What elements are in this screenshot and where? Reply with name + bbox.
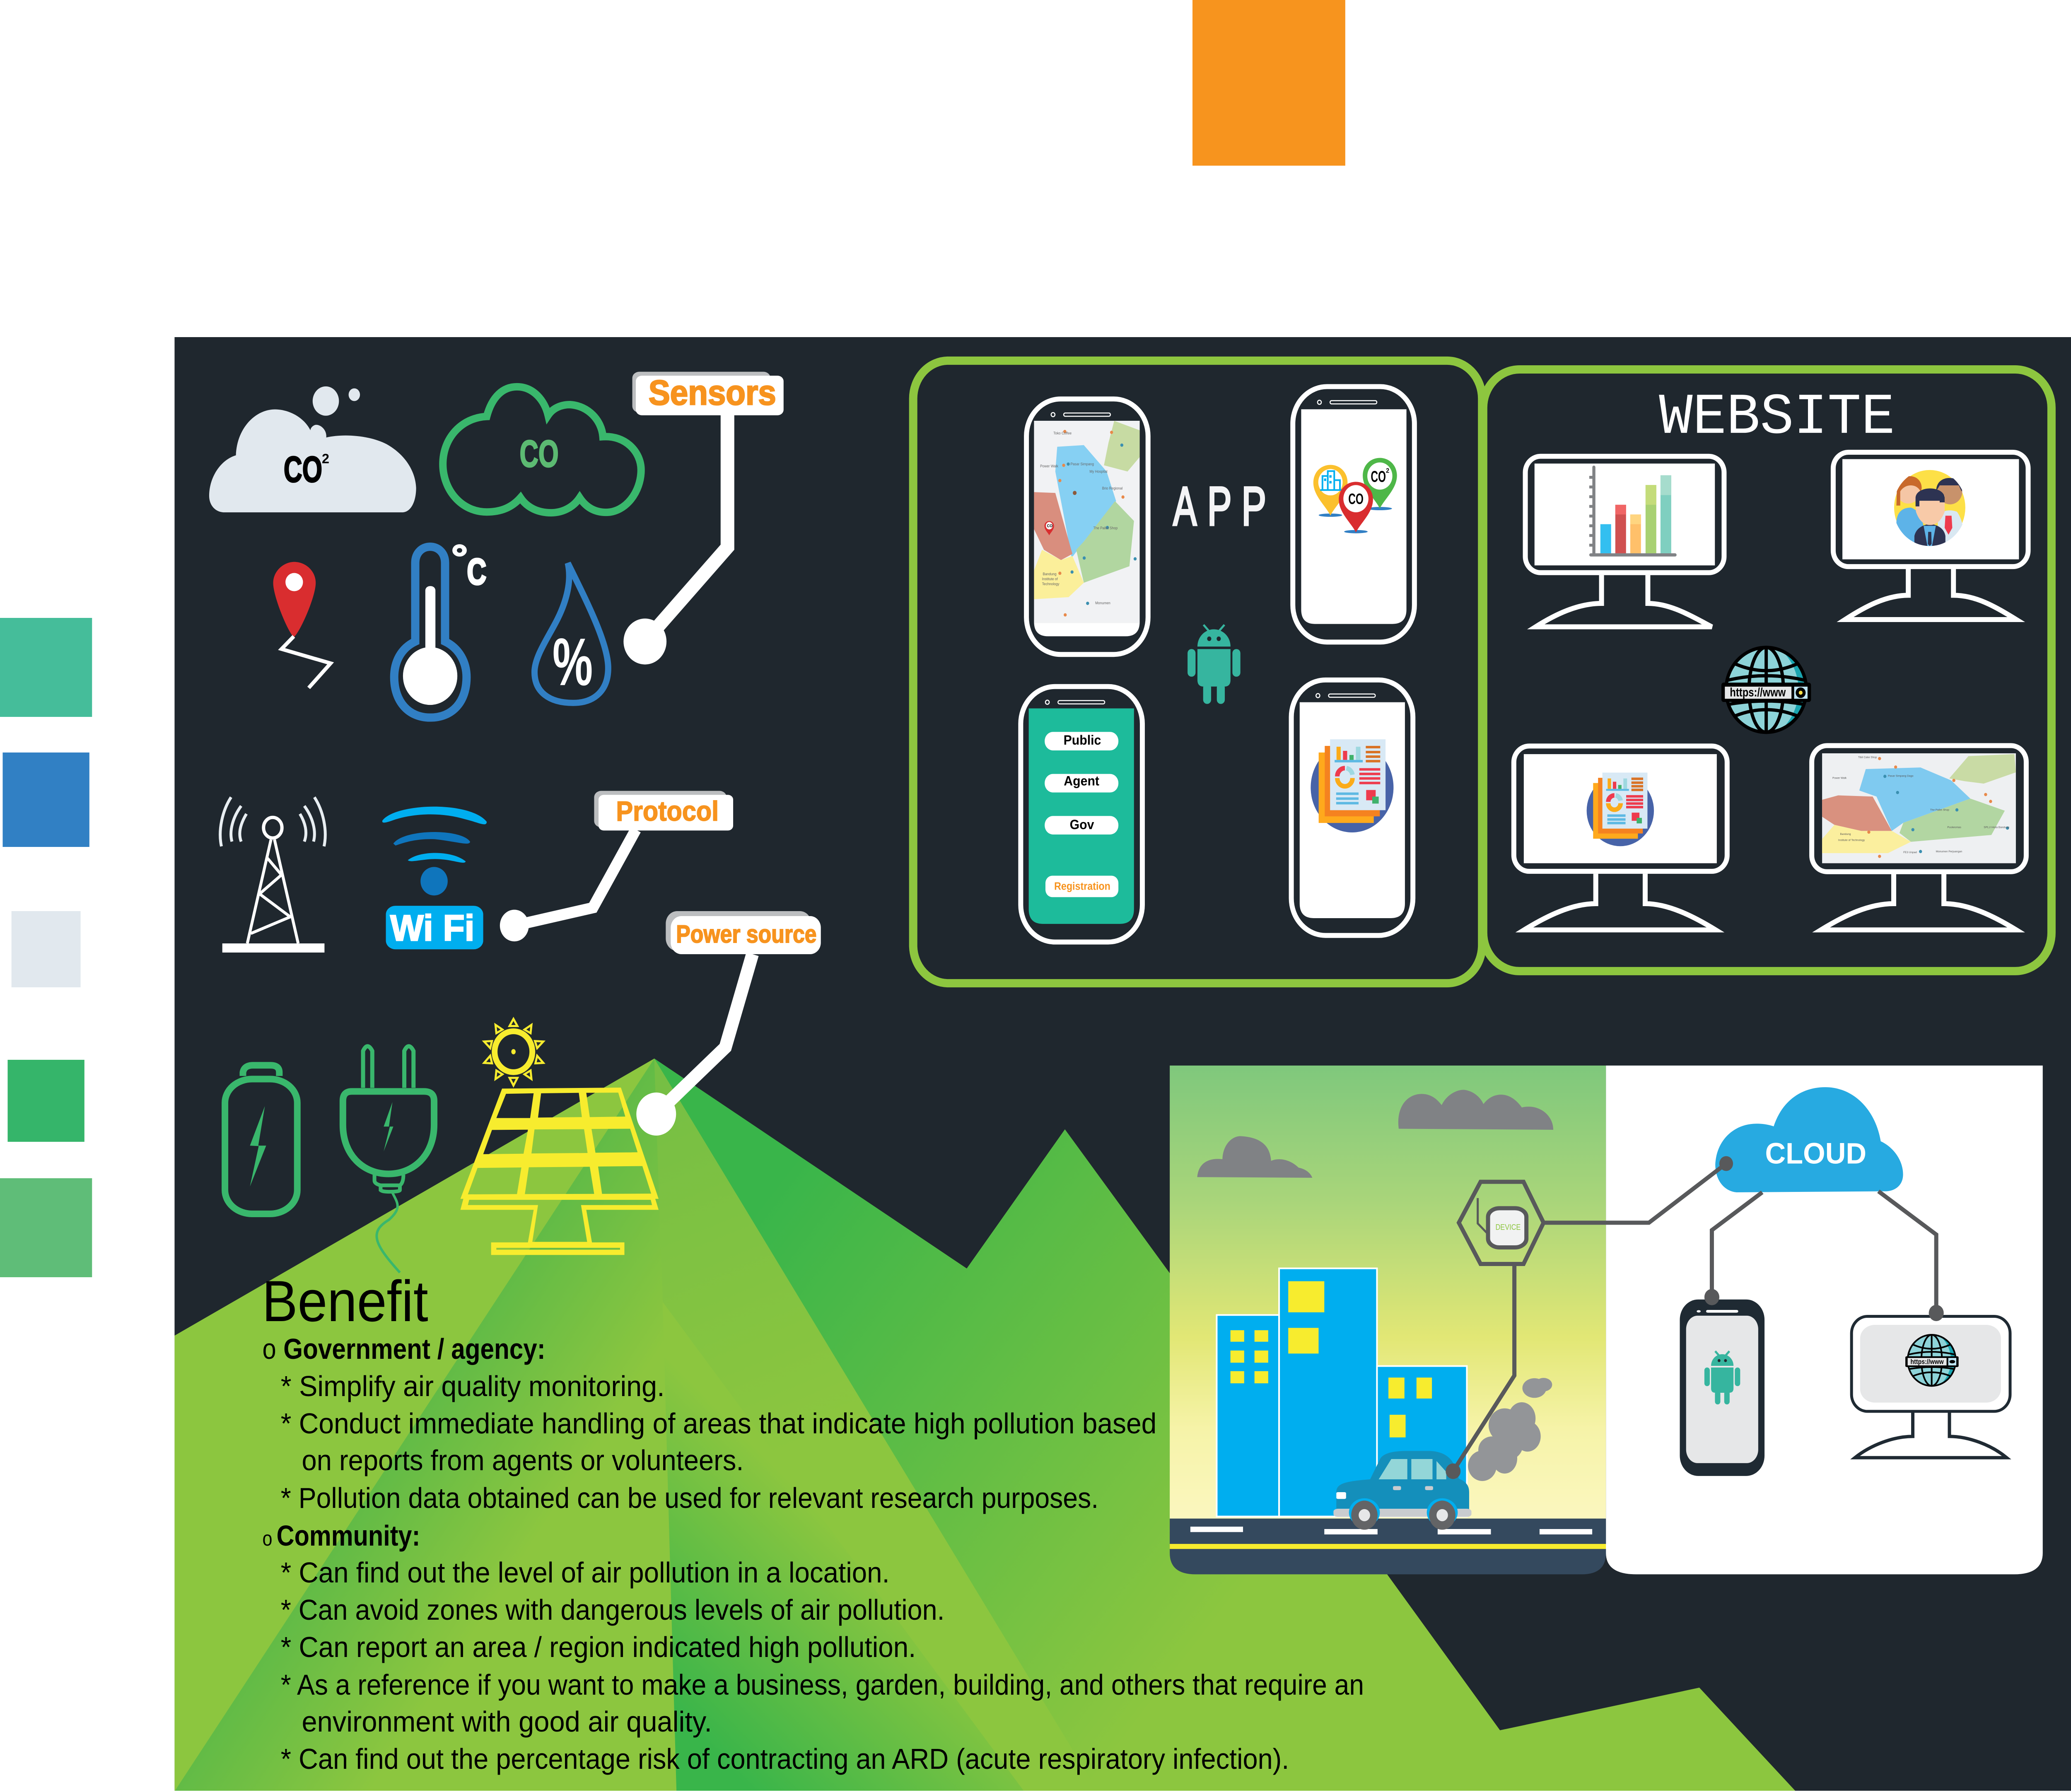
monitor: bar chart — [1525, 456, 1724, 627]
icon: sun — [484, 1019, 543, 1085]
text block: benefits list: * Pollution data obtained can be used for relevant research purposes. — [281, 1482, 1098, 1515]
icon: location pin — [273, 562, 331, 688]
monitor: pollution map: The Pallet Shop — [1930, 808, 1949, 812]
icon: CO cloud — [443, 387, 641, 513]
text block: benefits list: * Can avoid zones with dangerous levels of air pollution. — [281, 1594, 945, 1626]
icon: android — [1188, 625, 1241, 704]
monitor: report — [1514, 746, 1727, 930]
monitor: pollution map: Tibil Cake Shop — [1858, 756, 1877, 759]
bar chart — [1589, 465, 1677, 557]
subheading: community: Community: — [277, 1520, 420, 1552]
phone: pollution map: Institute of — [1042, 577, 1058, 581]
icon: globe: https://www — [1730, 686, 1786, 699]
icon: globe: https://www — [1911, 1358, 1944, 1365]
callout: Protocol: Protocol — [616, 796, 719, 827]
icon: clouds — [1197, 1090, 1553, 1178]
phone: pollution map — [1026, 399, 1148, 654]
icon: radio tower — [220, 797, 325, 953]
icon: plug — [343, 1046, 434, 1273]
subheading: community: o — [263, 1527, 273, 1550]
pin: CO2: 2 — [1386, 467, 1389, 475]
phone: pollution map: Technology — [1042, 582, 1060, 586]
phone: pollution map: Pasar Simpang — [1071, 462, 1094, 466]
icon: report — [1311, 739, 1393, 832]
text block: benefits list: * Conduct immediate handling of areas that indicate high pollution based — [281, 1408, 1156, 1440]
icon: CLOUD: CLOUD — [1765, 1137, 1866, 1170]
heading: APP: P — [1241, 475, 1266, 537]
phone: pollutant pins — [1293, 387, 1414, 642]
monitor: pollution map: Bandung — [1840, 833, 1851, 836]
colour palette swatches — [0, 618, 92, 1277]
button: Registration: Registration — [1054, 880, 1110, 892]
button: Agent: Agent — [1064, 773, 1099, 789]
icon: CO cloud: CO — [519, 432, 559, 475]
icon: thermometer: ° — [451, 537, 468, 578]
icon: thermometer — [394, 537, 486, 718]
icon: CO2 cloud: CO — [284, 449, 322, 490]
subheading: government: Government / agency: — [283, 1333, 546, 1365]
phone: pollution map: Brio Regional — [1102, 486, 1122, 490]
phone: pollution map: Monumen — [1095, 601, 1110, 605]
monitor: pollution map: Pasar Simpang Dago — [1888, 774, 1914, 778]
monitor: pollution map: Power Walk — [1832, 777, 1847, 779]
panel: website — [1483, 369, 2052, 971]
button: Public — [1045, 732, 1118, 750]
text block: benefits list: * Can find out the percentage risk of contracting an ARD (acute respiratory infection). — [281, 1743, 1289, 1775]
icon: device hexagon: DEVICE — [1496, 1223, 1521, 1232]
scene: city sky — [1170, 1066, 1606, 1519]
icon: device hexagon — [1459, 1182, 1544, 1264]
text block: benefits list: on reports from agents or volunteers. — [302, 1445, 743, 1477]
background panel — [174, 337, 2071, 1791]
white panel — [1606, 1066, 2043, 1574]
callout: Sensors: Sensors — [649, 373, 776, 412]
icon: android — [1704, 1351, 1740, 1404]
green mountains background — [174, 1035, 1855, 1792]
heading: Benefit: Benefit — [262, 1269, 428, 1334]
pin: building — [1313, 465, 1347, 516]
icon: thermometer: C — [467, 551, 486, 592]
button: Gov: Gov — [1070, 817, 1094, 832]
panel border — [1483, 369, 2052, 971]
panel border — [913, 361, 1482, 983]
phone: pollution map: Toko Coffee — [1053, 431, 1072, 435]
icon: CLOUD — [1715, 1087, 1903, 1192]
phone: report — [1291, 680, 1413, 936]
icon: car — [1333, 1451, 1471, 1530]
decorative orange square — [1192, 0, 1345, 166]
icon: buildings — [1217, 1269, 1467, 1517]
icon: CO2 cloud: 2 — [322, 451, 329, 466]
monitor: pollution map: Monumen Perjuangan — [1936, 850, 1962, 853]
icon: Wi-Fi — [382, 807, 487, 949]
connection dots — [1446, 1156, 1944, 1479]
pin: CO2: CO — [1371, 468, 1386, 485]
icon: globe — [1905, 1335, 1959, 1386]
icon: battery — [225, 1065, 297, 1214]
monitor: pollution map: Puskesmas — [1947, 826, 1961, 829]
connector: sensors — [623, 412, 727, 665]
button: Agent — [1045, 773, 1118, 792]
icon: solar panel — [461, 1088, 659, 1255]
pin: CO: CO — [1348, 491, 1364, 507]
panel: system diagram — [1170, 1066, 2043, 1574]
phone: pollution map: Bandung — [1043, 572, 1057, 576]
heading: APP — [1173, 475, 1266, 537]
monitor: pollution map: Institute of Technology — [1838, 839, 1865, 842]
connector: protocol — [500, 830, 636, 941]
icon: CO2 cloud — [209, 386, 416, 512]
callout: Protocol — [594, 791, 733, 830]
callout: Power source: Power source — [676, 921, 817, 948]
callout: Power source — [666, 911, 821, 954]
icon: monitor — [1851, 1305, 2010, 1458]
phone: login menu — [1021, 687, 1142, 942]
text block: benefits list — [263, 1333, 1364, 1775]
icon: Wi-Fi: Wi Fi — [390, 908, 474, 948]
monitor: pollution map — [1812, 745, 2026, 930]
heading: WEBSITE: WEBSITE — [1659, 385, 1895, 450]
icon: humidity drop — [534, 563, 608, 703]
icon: phone — [1680, 1289, 1764, 1476]
icon: globe — [1721, 647, 1811, 732]
phone: pollution map: My Hospital — [1089, 469, 1108, 474]
button: Registration — [1045, 875, 1118, 897]
pin: CO2 — [1363, 458, 1397, 509]
button: Gov — [1045, 816, 1118, 834]
subheading: government: o — [263, 1333, 276, 1365]
heading: APP: P — [1207, 475, 1232, 537]
icon: map pin CO — [1045, 521, 1054, 535]
connector: power source — [636, 954, 753, 1136]
phone: pollution map: The Pallet Shop — [1093, 526, 1118, 530]
text block: benefits list: * Can find out the level of air pollution in a location. — [281, 1557, 890, 1589]
icon: humidity drop: % — [553, 625, 593, 699]
heading: APP: A — [1173, 475, 1197, 537]
icon: exhaust smoke — [1468, 1378, 1552, 1481]
connection lines — [1453, 1164, 1936, 1471]
pin: CO — [1339, 482, 1373, 533]
power section — [225, 1019, 659, 1273]
scene: road — [1170, 1519, 1607, 1574]
monitor: pollution map: SPLU Hiota Bandung — [1984, 826, 2009, 829]
phone: pollution map: Power Walk — [1040, 464, 1059, 468]
text block: benefits list: * As a reference if you want to make a business, garden, building, and others that require an — [281, 1669, 1364, 1701]
icon: map pin CO: CO — [1047, 524, 1053, 528]
text block: benefits list: environment with good air quality. — [302, 1706, 712, 1738]
icon: report — [1587, 773, 1654, 846]
text block: benefits list: * Simplify air quality monitoring. — [281, 1370, 665, 1403]
icon: people — [1894, 470, 1965, 546]
button: Public: Public — [1064, 732, 1101, 748]
monitor: people — [1833, 452, 2028, 620]
text block: benefits list: * Can report an area / region indicated high pollution. — [281, 1631, 916, 1664]
panel: app — [913, 361, 1482, 983]
sensors section — [209, 372, 784, 953]
monitor: pollution map: FE3 Unpad — [1903, 851, 1917, 854]
